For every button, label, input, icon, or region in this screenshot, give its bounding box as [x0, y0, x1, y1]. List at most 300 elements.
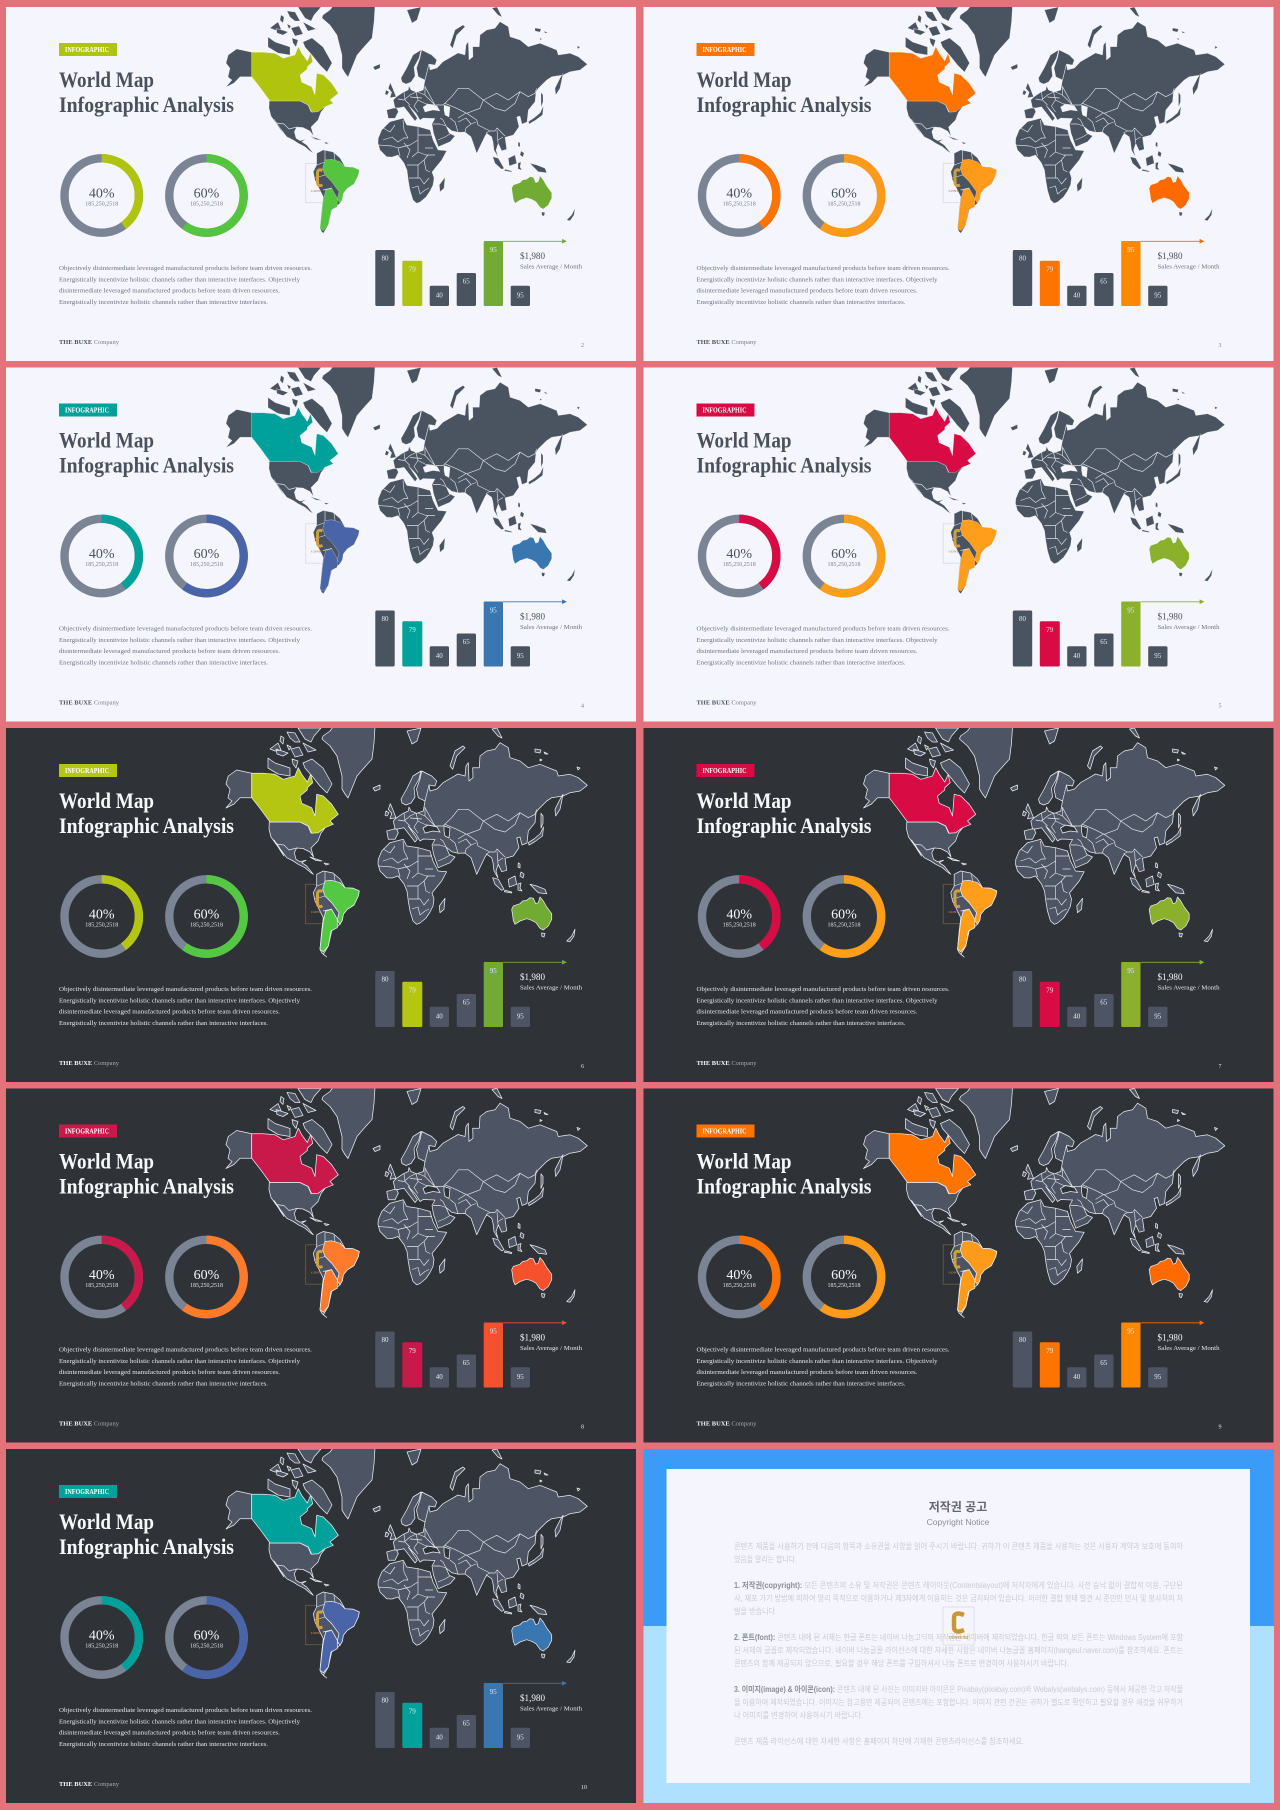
tag: INFOGRAPHIC — [65, 46, 109, 54]
bar chart: 80 — [1019, 976, 1026, 984]
donut 40% — [702, 879, 776, 954]
donut 40%: 185,250,2518 — [85, 1644, 118, 1650]
world map: CONT — [948, 910, 959, 914]
bar chart: 79 — [409, 1708, 416, 1716]
donut 40%: 185,250,2518 — [85, 202, 118, 208]
title: Infographic Analysis — [696, 92, 872, 117]
sales figure: $1,980 — [520, 1332, 545, 1344]
donut 60% — [169, 879, 244, 954]
bar chart: 80 — [382, 1696, 389, 1704]
arrow — [1140, 600, 1204, 604]
bar chart: 80 — [1019, 615, 1026, 623]
page number: 5 — [1218, 704, 1222, 710]
donut 60%: 185,250,2518 — [828, 562, 860, 568]
paragraph: Objectively disintermediate leveraged manufactured products before team driven resources. — [59, 626, 312, 632]
world map: CONT — [311, 1631, 322, 1635]
donut 40%: 40% — [89, 547, 115, 562]
panel: slide 3 orange on light — [644, 6, 1274, 361]
donut 60%: 60% — [194, 1268, 220, 1283]
donut 40% — [64, 158, 139, 233]
notice body: 사, 재포 가기 방법에 의하여 영리 목적으로 이용하거나 제3자에게 이용하는 것은 금지되어 있습니다. 이러한 결합 형태 발견 시 준민민 민사 및 형사처의 처 — [734, 1593, 1183, 1603]
donut 60%: 185,250,2518 — [190, 1283, 223, 1289]
donut 60%: 185,250,2518 — [190, 562, 223, 568]
tag: INFOGRAPHIC — [702, 1128, 746, 1136]
paragraph — [696, 265, 950, 306]
world map — [864, 6, 1225, 236]
bar chart: 40 — [436, 652, 443, 660]
world map: CONT — [948, 550, 959, 554]
donut 60% — [169, 1600, 244, 1675]
sales figure: Sales Average / Month — [1158, 1345, 1220, 1352]
paragraph: Energistically incentivize holistic channels rather than interactive interfaces. — [59, 1020, 268, 1027]
bar chart: 65 — [1100, 998, 1108, 1006]
donut 60%: 60% — [194, 547, 220, 562]
sales figure: $1,980 — [520, 972, 545, 983]
paragraph — [59, 265, 312, 306]
footer company: THE BUXE Company — [59, 1420, 120, 1428]
paragraph: Energistically incentivize holistic channels rather than interactive interfaces. Objectively — [59, 1718, 301, 1725]
bar chart: 95 — [1127, 606, 1135, 614]
bar chart: 79 — [1046, 626, 1054, 634]
sales figure — [520, 612, 583, 631]
title: World Map — [59, 1509, 154, 1534]
title — [696, 67, 872, 117]
paragraph: disintermediate leveraged manufactured products before team driven resources. — [59, 288, 280, 295]
sales figure: Sales Average / Month — [520, 1345, 583, 1352]
tag — [696, 1124, 754, 1138]
bar chart — [375, 1322, 530, 1388]
bar chart: 95 — [490, 1688, 497, 1696]
bar chart: 40 — [436, 1012, 443, 1020]
notice body: 된 서체의 글꼴로 제작되었습니다. 네이버 나눔글꼴 라이선스에 대한 자세한 사항은 네이버 나눔글꼴 홈페이지(hangeul.naver.com)를 참조하세요. 폰트는 — [734, 1645, 1183, 1655]
notice title — [927, 1499, 990, 1527]
bar chart: 79 — [409, 626, 416, 634]
sales figure: $1,980 — [1158, 251, 1183, 262]
bar chart: 80 — [382, 1336, 389, 1344]
panel: slide 6 lime on dark — [6, 727, 636, 1082]
sales figure — [1158, 972, 1220, 992]
title: World Map — [59, 428, 154, 452]
donut 60%: 185,250,2518 — [828, 923, 860, 929]
sales figure: Sales Average / Month — [520, 264, 583, 271]
notice title: Copyright Notice — [927, 1517, 990, 1527]
sales figure: Sales Average / Month — [1158, 624, 1220, 631]
donut 40%: 185,250,2518 — [723, 202, 756, 208]
donut 40% — [64, 1600, 139, 1675]
sales figure: $1,980 — [520, 251, 545, 262]
paragraph — [696, 1346, 950, 1388]
arrow — [503, 1321, 566, 1324]
donut 40%: 40% — [89, 1268, 115, 1283]
footer company: THE BUXE Company — [59, 1060, 120, 1067]
donut 60%: 60% — [831, 547, 857, 562]
donut 60%: 60% — [831, 186, 857, 202]
page number: 9 — [1218, 1424, 1222, 1430]
arrow — [1140, 1321, 1204, 1324]
panel: slide 2 lime on light — [6, 6, 636, 361]
title: Infographic Analysis — [59, 92, 234, 117]
tag — [59, 1124, 117, 1138]
page number: 8 — [581, 1424, 584, 1430]
tag: INFOGRAPHIC — [702, 406, 746, 414]
bar chart: 40 — [436, 1734, 443, 1742]
notice body: 나 이미지를 변경하여 사용하시기 바랍니다. — [734, 1710, 863, 1720]
paragraph: Energistically incentivize holistic channels rather than interactive interfaces. — [59, 1741, 268, 1748]
paragraph: Objectively disintermediate leveraged manufactured products before team driven resources. — [59, 265, 312, 272]
panel: slide 10 teal on dark — [6, 1448, 636, 1803]
page number: 7 — [1218, 1064, 1222, 1070]
bar chart: 95 — [517, 1012, 524, 1020]
title: Infographic Analysis — [696, 452, 872, 478]
donut 60% — [807, 879, 881, 954]
page number: 6 — [581, 1064, 584, 1070]
arrow — [503, 960, 566, 964]
donut 60%: 60% — [831, 1268, 857, 1283]
bar chart: 79 — [1046, 1347, 1054, 1355]
bar chart: 95 — [490, 967, 497, 975]
bar chart: 40 — [1073, 1012, 1081, 1020]
footer company: THE BUXE Company — [59, 1781, 120, 1788]
donut 40%: 40% — [726, 1268, 752, 1283]
paragraph: Objectively disintermediate leveraged manufactured products before team driven resources. — [59, 986, 312, 993]
donut 40% — [702, 519, 776, 593]
notice body: 벌을 받습니다. — [734, 1606, 777, 1616]
tag — [696, 404, 754, 416]
paragraph: Objectively disintermediate leveraged manufactured products before team driven resources. — [696, 265, 950, 272]
sales figure: $1,980 — [1158, 1332, 1183, 1344]
footer company: THE BUXE Company — [696, 700, 757, 706]
paragraph: Energistically incentivize holistic channels rather than interactive interfaces. — [59, 660, 268, 666]
world map — [226, 6, 587, 236]
paragraph: Objectively disintermediate leveraged manufactured products before team driven resources. — [59, 1707, 312, 1714]
watermark — [943, 1607, 974, 1645]
paragraph: disintermediate leveraged manufactured products before team driven resources. — [696, 288, 918, 295]
tag: INFOGRAPHIC — [65, 1488, 109, 1496]
footer company: THE BUXE Company — [696, 1420, 757, 1428]
donut 60% — [169, 519, 244, 593]
bar chart: 40 — [1073, 652, 1081, 660]
bar chart: 65 — [1100, 278, 1108, 286]
bar chart: 95 — [490, 1328, 497, 1336]
donut 60% — [807, 519, 881, 593]
title — [59, 788, 234, 838]
tag: INFOGRAPHIC — [702, 767, 746, 775]
tag: INFOGRAPHIC — [65, 767, 109, 775]
bar chart: 95 — [1154, 1373, 1162, 1381]
panel: slide 8 crimson and coral on dark — [6, 1088, 636, 1442]
paragraph: disintermediate leveraged manufactured products before team driven resources. — [696, 648, 918, 655]
paragraph: Objectively disintermediate leveraged manufactured products before team driven resources. — [696, 1346, 950, 1354]
sales figure: $1,980 — [1158, 612, 1183, 622]
donut 60%: 185,250,2518 — [828, 202, 860, 208]
sales figure: Sales Average / Month — [520, 624, 583, 631]
bar chart: 95 — [1154, 292, 1162, 300]
title: World Map — [59, 67, 154, 92]
tag: INFOGRAPHIC — [65, 406, 109, 414]
paragraph: disintermediate leveraged manufactured products before team driven resources. — [59, 648, 280, 655]
arrow — [503, 1682, 566, 1685]
world map: CONT — [311, 910, 322, 914]
arrow — [503, 240, 566, 243]
paragraph: Energistically incentivize holistic channels rather than interactive interfaces. — [59, 299, 268, 306]
donut 40%: 40% — [89, 186, 115, 202]
world map — [864, 727, 1225, 957]
world map — [226, 1448, 587, 1678]
panel: slide 9 orange on dark — [644, 1088, 1274, 1442]
bar chart: 80 — [382, 254, 389, 262]
watermark: CONTENT — [949, 1635, 969, 1640]
paragraph: disintermediate leveraged manufactured products before team driven resources. — [59, 1009, 280, 1016]
world map: CONT — [948, 189, 959, 193]
donut 40%: 185,250,2518 — [85, 923, 118, 929]
donut 40%: 185,250,2518 — [723, 1283, 756, 1289]
notice body: 였음을 알리는 합니다. — [734, 1554, 797, 1564]
donut 40%: 40% — [726, 186, 752, 202]
paragraph: Energistically incentivize holistic channels rather than interactive interfaces. Objectively — [696, 637, 938, 644]
sales figure — [520, 251, 583, 271]
panel: slide 7 crimson on dark — [644, 727, 1274, 1082]
arrow — [1140, 960, 1204, 964]
bar chart: 40 — [436, 292, 443, 300]
bar chart: 80 — [382, 615, 389, 623]
bar chart: 79 — [409, 986, 416, 994]
donut 40% — [702, 1240, 776, 1314]
notice body: 3. 이미지(image) & 아이콘(icon): 콘텐츠 내에 된 사진는 이미지와 아이콘은 Pixabay(pixabay.com)와 Webalys(webalys.com) 등에서 제공한 각고 저작물 — [734, 1684, 1183, 1694]
title: Infographic Analysis — [696, 813, 872, 838]
donut 40%: 185,250,2518 — [85, 562, 118, 568]
paragraph: Energistically incentivize holistic channels rather than interactive interfaces. Objectively — [59, 637, 301, 644]
tag — [59, 404, 117, 416]
arrow — [1140, 240, 1204, 243]
bar chart: 95 — [517, 292, 524, 300]
bar chart — [375, 602, 530, 666]
donut 40%: 185,250,2518 — [723, 923, 756, 929]
bar chart: 95 — [1127, 246, 1135, 254]
sales figure — [1158, 612, 1220, 631]
tag: INFOGRAPHIC — [65, 1128, 109, 1136]
bar chart: 65 — [463, 1720, 470, 1728]
title: World Map — [696, 428, 792, 452]
world map: CONT — [311, 1270, 322, 1274]
sales figure: Sales Average / Month — [1158, 985, 1220, 992]
donut 40% — [64, 879, 139, 954]
title: Infographic Analysis — [59, 1534, 234, 1559]
tag — [59, 764, 117, 777]
world map — [864, 1088, 1225, 1318]
title — [59, 428, 234, 478]
sales figure — [520, 1693, 583, 1713]
paragraph: Energistically incentivize holistic channels rather than interactive interfaces. Objectively — [696, 276, 938, 283]
donut 40% — [702, 158, 776, 233]
donut 60%: 185,250,2518 — [190, 202, 223, 208]
paragraph: Energistically incentivize holistic channels rather than interactive interfaces. Objectively — [59, 997, 301, 1004]
bar chart: 95 — [1127, 967, 1135, 975]
notice body: 1. 저작권(copyright): 모든 콘텐츠의 소유 및 저작권은 콘텐츠 레이아웃(Contentslayout)에 저작자에게 있습니다. 사전 승낙 없이 결합적 이용, 구단된 — [734, 1580, 1183, 1590]
paragraph: Objectively disintermediate leveraged manufactured products before team driven resources. — [696, 986, 950, 993]
bar chart: 95 — [1154, 1012, 1162, 1020]
bar chart: 95 — [1127, 1328, 1135, 1336]
footer company: THE BUXE Company — [696, 339, 757, 346]
bar chart: 95 — [517, 1373, 524, 1381]
bar chart: 65 — [463, 638, 470, 646]
footer company: THE BUXE Company — [59, 339, 120, 346]
bar chart: 40 — [436, 1373, 443, 1381]
paragraph: Objectively disintermediate leveraged manufactured products before team driven resources. — [696, 626, 950, 632]
paragraph: Energistically incentivize holistic channels rather than interactive interfaces. — [696, 1380, 906, 1388]
title: World Map — [59, 1148, 154, 1174]
bar chart: 65 — [1100, 1359, 1108, 1367]
sales figure: $1,980 — [1158, 972, 1183, 983]
donut 40% — [64, 1240, 139, 1314]
donut 40%: 185,250,2518 — [723, 562, 756, 568]
bar chart: 95 — [490, 606, 497, 614]
title — [696, 1148, 872, 1198]
donut 60%: 185,250,2518 — [190, 1644, 223, 1650]
donut 40%: 185,250,2518 — [85, 1283, 118, 1289]
tag — [59, 43, 117, 56]
world map — [864, 366, 1225, 596]
tag: INFOGRAPHIC — [702, 46, 746, 54]
notice body: 콘텐츠의 함께 제공되지 않으므로, 필요할 경우 해당 폰트를 구입하셔서 나눔 폰트로 변경하여 사용하시기 바랍니다. — [734, 1658, 1069, 1668]
notice title: 저작권 공고 — [929, 1499, 987, 1514]
title — [696, 428, 872, 478]
paragraph: disintermediate leveraged manufactured products before team driven resources. — [696, 1369, 918, 1376]
donut 60%: 185,250,2518 — [190, 923, 223, 929]
tag — [696, 764, 754, 777]
world map: CONT — [311, 189, 322, 193]
bar chart: 40 — [1073, 292, 1081, 300]
tag — [696, 43, 754, 56]
paragraph: Energistically incentivize holistic channels rather than interactive interfaces. — [59, 1380, 268, 1388]
title: World Map — [696, 788, 792, 813]
bar chart: 65 — [463, 998, 470, 1006]
title: World Map — [696, 1148, 792, 1174]
title — [59, 1148, 234, 1198]
sales figure — [1158, 1332, 1220, 1352]
donut 60%: 185,250,2518 — [828, 1283, 860, 1289]
donut 60% — [169, 1240, 244, 1314]
bar chart: 80 — [382, 976, 389, 984]
sales figure: Sales Average / Month — [520, 985, 583, 992]
world map — [226, 727, 587, 957]
title — [59, 67, 234, 117]
sales figure — [520, 1332, 583, 1352]
page number: 4 — [581, 704, 584, 710]
notice body: 2. 폰트(font): 콘텐츠 내에 된 서체는 한글 폰트는 네이버 나눔고딕의 저작권은 네이버에 제작되었습니다. 한글 외의 보든 폰트는 Windows System에 포함 — [734, 1632, 1184, 1642]
page number: 2 — [581, 343, 584, 349]
donut 60%: 60% — [194, 1628, 220, 1644]
bar chart: 40 — [1073, 1373, 1081, 1381]
bar chart — [1013, 241, 1168, 306]
footer company: THE BUXE Company — [696, 1060, 757, 1067]
notice body: 을 이용하여 제작되었습니다. 이미지는 참고용만 제공되어 콘텐츠에는 포함합니다. 이미지 관련 건권는 귀하가 별도로 확인하고 필요할 경우 새것을 쉬우하거 — [734, 1697, 1183, 1707]
bar chart — [375, 962, 530, 1027]
bar chart: 65 — [463, 1359, 470, 1367]
world map — [226, 366, 587, 596]
bar chart — [375, 1683, 530, 1748]
bar chart — [375, 241, 530, 306]
paragraph — [696, 986, 950, 1027]
paragraph: Energistically incentivize holistic channels rather than interactive interfaces. Objectively — [696, 997, 938, 1004]
world map — [226, 1088, 587, 1318]
title — [59, 1509, 234, 1559]
paragraph: Energistically incentivize holistic channels rather than interactive interfaces. Objectively — [59, 1358, 301, 1365]
title — [696, 788, 872, 838]
page number: 10 — [581, 1785, 587, 1791]
notice body: 콘텐츠 제품 라이선스에 대한 자세한 사항은 홈페이지 하단에 기재한 콘텐츠라이선스를 참조하세요. — [734, 1736, 1024, 1746]
title: Infographic Analysis — [59, 452, 234, 478]
paragraph: Energistically incentivize holistic channels rather than interactive interfaces. — [696, 1020, 906, 1027]
bar chart — [1013, 962, 1168, 1027]
title: Infographic Analysis — [696, 1174, 872, 1198]
bar chart: 95 — [517, 1734, 524, 1742]
sales figure: $1,980 — [520, 1693, 545, 1704]
bar chart: 80 — [1019, 254, 1026, 262]
paragraph: disintermediate leveraged manufactured products before team driven resources. — [59, 1730, 280, 1737]
world map: CONT — [948, 1270, 959, 1274]
world map: CONT — [311, 550, 322, 554]
bar chart — [1013, 1322, 1168, 1388]
sales figure: Sales Average / Month — [520, 1706, 583, 1713]
sales figure: $1,980 — [520, 612, 545, 622]
bar chart: 79 — [409, 266, 416, 274]
bar chart: 65 — [463, 278, 470, 286]
bar chart: 95 — [1154, 652, 1162, 660]
paragraph: Energistically incentivize holistic channels rather than interactive interfaces. — [696, 299, 906, 306]
tag — [59, 1485, 117, 1498]
donut 60%: 60% — [194, 186, 220, 202]
panel: copyright notice — [644, 1449, 1274, 1803]
panel: slide 5 crimson on light — [644, 366, 1274, 722]
paragraph — [696, 626, 950, 666]
donut 40%: 40% — [89, 908, 115, 922]
bar chart — [1013, 602, 1168, 666]
bar chart: 95 — [517, 652, 524, 660]
title: Infographic Analysis — [59, 1174, 234, 1198]
bar chart: 79 — [409, 1347, 416, 1355]
bar chart: 65 — [1100, 638, 1108, 646]
paragraph — [59, 1346, 312, 1388]
paragraph: Energistically incentivize holistic channels rather than interactive interfaces. Objectively — [59, 276, 301, 283]
donut 60%: 60% — [831, 908, 857, 922]
donut 60% — [807, 158, 881, 233]
paragraph: Energistically incentivize holistic channels rather than interactive interfaces. — [696, 660, 906, 666]
paragraph — [59, 626, 312, 666]
arrow — [503, 600, 566, 604]
donut 60% — [807, 1240, 881, 1314]
footer company: THE BUXE Company — [59, 700, 120, 706]
paragraph: disintermediate leveraged manufactured products before team driven resources. — [59, 1369, 280, 1376]
paragraph — [59, 1707, 312, 1748]
donut 60% — [169, 158, 244, 233]
paragraph — [59, 986, 312, 1027]
paragraph: Objectively disintermediate leveraged manufactured products before team driven resources. — [59, 1346, 312, 1354]
donut 60%: 60% — [194, 908, 220, 922]
title: World Map — [59, 788, 154, 813]
title: Infographic Analysis — [59, 813, 234, 838]
bar chart: 79 — [1046, 986, 1054, 994]
notice body — [734, 1541, 1184, 1746]
notice body: 콘텐츠 제품을 사용하기 전에 다음의 항목과 소유권을 사항을 읽어 주시기 바랍니다. 귀하가 이 콘텐츠 제품을 사용하는 것은 사용자 계약과 보호에 동의하 — [734, 1541, 1184, 1551]
sales figure — [520, 972, 583, 992]
bar chart: 80 — [1019, 1336, 1026, 1344]
sales figure: Sales Average / Month — [1158, 264, 1220, 271]
bar chart: 95 — [490, 246, 497, 254]
sales figure — [1158, 251, 1220, 271]
paragraph: Energistically incentivize holistic channels rather than interactive interfaces. Objectively — [696, 1358, 938, 1365]
donut 40% — [64, 519, 139, 593]
title: World Map — [696, 67, 792, 92]
